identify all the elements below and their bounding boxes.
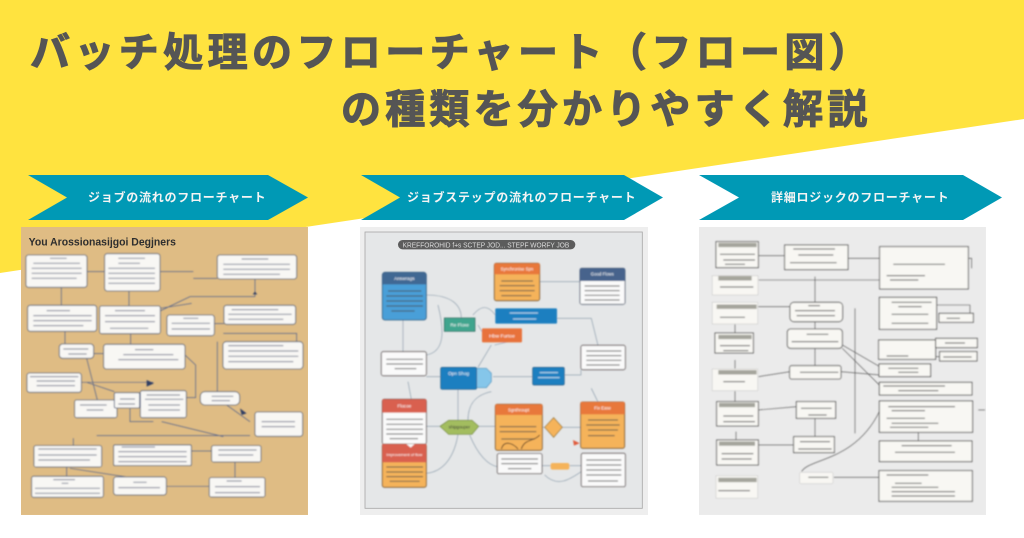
connector arrow heads — [147, 292, 257, 415]
step: blue bar — [495, 308, 557, 324]
step: open shape — [441, 367, 491, 389]
step: good flows — [580, 268, 625, 304]
step: red white: Flocoe — [397, 404, 412, 409]
step: teal: Re Floxe — [450, 322, 469, 327]
step: failure — [573, 402, 625, 448]
arrow banner: detail logic — [699, 175, 1002, 220]
arrow banner: job flow: ジョブの流れのフローチャート — [88, 190, 266, 204]
note box left — [381, 352, 426, 376]
note box bottom right — [581, 453, 625, 487]
step: orange — [482, 328, 522, 342]
panel: job step flowchart image — [360, 227, 648, 515]
step: red orange — [382, 444, 426, 487]
arrow banner: detail logic: 詳細ロジックのフローチャート — [771, 190, 949, 204]
note box centre — [497, 454, 542, 474]
label pill — [551, 463, 569, 470]
panel heading: You Arossionasijgoi Degjners — [29, 236, 176, 248]
arrow banner: job flow — [28, 175, 308, 220]
title: バッチ処理のフローチャート（フロー図） — [30, 31, 873, 75]
title — [30, 31, 873, 132]
panel title pill: KREFFOROHID f+s SCTEP JOD... STEPF WORFY JOB — [403, 240, 569, 249]
panel: detail logic flowchart image — [699, 227, 986, 515]
arrow banner: job step flow — [361, 175, 663, 220]
decision hexagon: shipgouper — [449, 424, 471, 429]
right column boxes — [879, 247, 977, 501]
step: blue small — [533, 367, 564, 385]
note box right — [581, 345, 625, 370]
decision diamond — [545, 418, 562, 437]
decision hexagon — [440, 420, 479, 434]
left column grey headers — [717, 245, 757, 480]
step: open shape: Opn Shog — [448, 371, 470, 376]
connectors — [735, 256, 985, 477]
step: failure: Fix Ease — [594, 405, 612, 410]
step: synchronise: Synchronise Spn — [501, 266, 534, 271]
title: の種類を分かりやすく解説 — [341, 88, 871, 132]
step: teal — [444, 318, 475, 331]
step: orange centre — [495, 404, 542, 450]
arrow banner: job step flow: ジョブステップの流れのフローチャート — [407, 190, 636, 204]
connectors — [403, 282, 598, 482]
yellow diagonal background — [0, 0, 1024, 273]
connectors — [61, 272, 297, 486]
middle column boxes — [785, 245, 848, 484]
left column boxes — [712, 242, 758, 498]
body text lines — [718, 249, 972, 496]
step: answers: Answrags — [394, 276, 415, 281]
step: orange: Hbw Furtoe — [489, 333, 515, 339]
step: orange centre: Sgnthroupt — [508, 407, 530, 412]
small text lines — [30, 258, 298, 493]
job boxes — [26, 254, 303, 497]
step: red orange: Improvement of flow — [386, 452, 422, 457]
step: answers — [382, 272, 426, 320]
step: synchronise — [494, 263, 540, 301]
step: red white — [382, 399, 426, 444]
body text lines — [386, 281, 621, 481]
panel: job flowchart image — [21, 227, 308, 515]
step: good flows: Good Flows — [591, 271, 614, 276]
